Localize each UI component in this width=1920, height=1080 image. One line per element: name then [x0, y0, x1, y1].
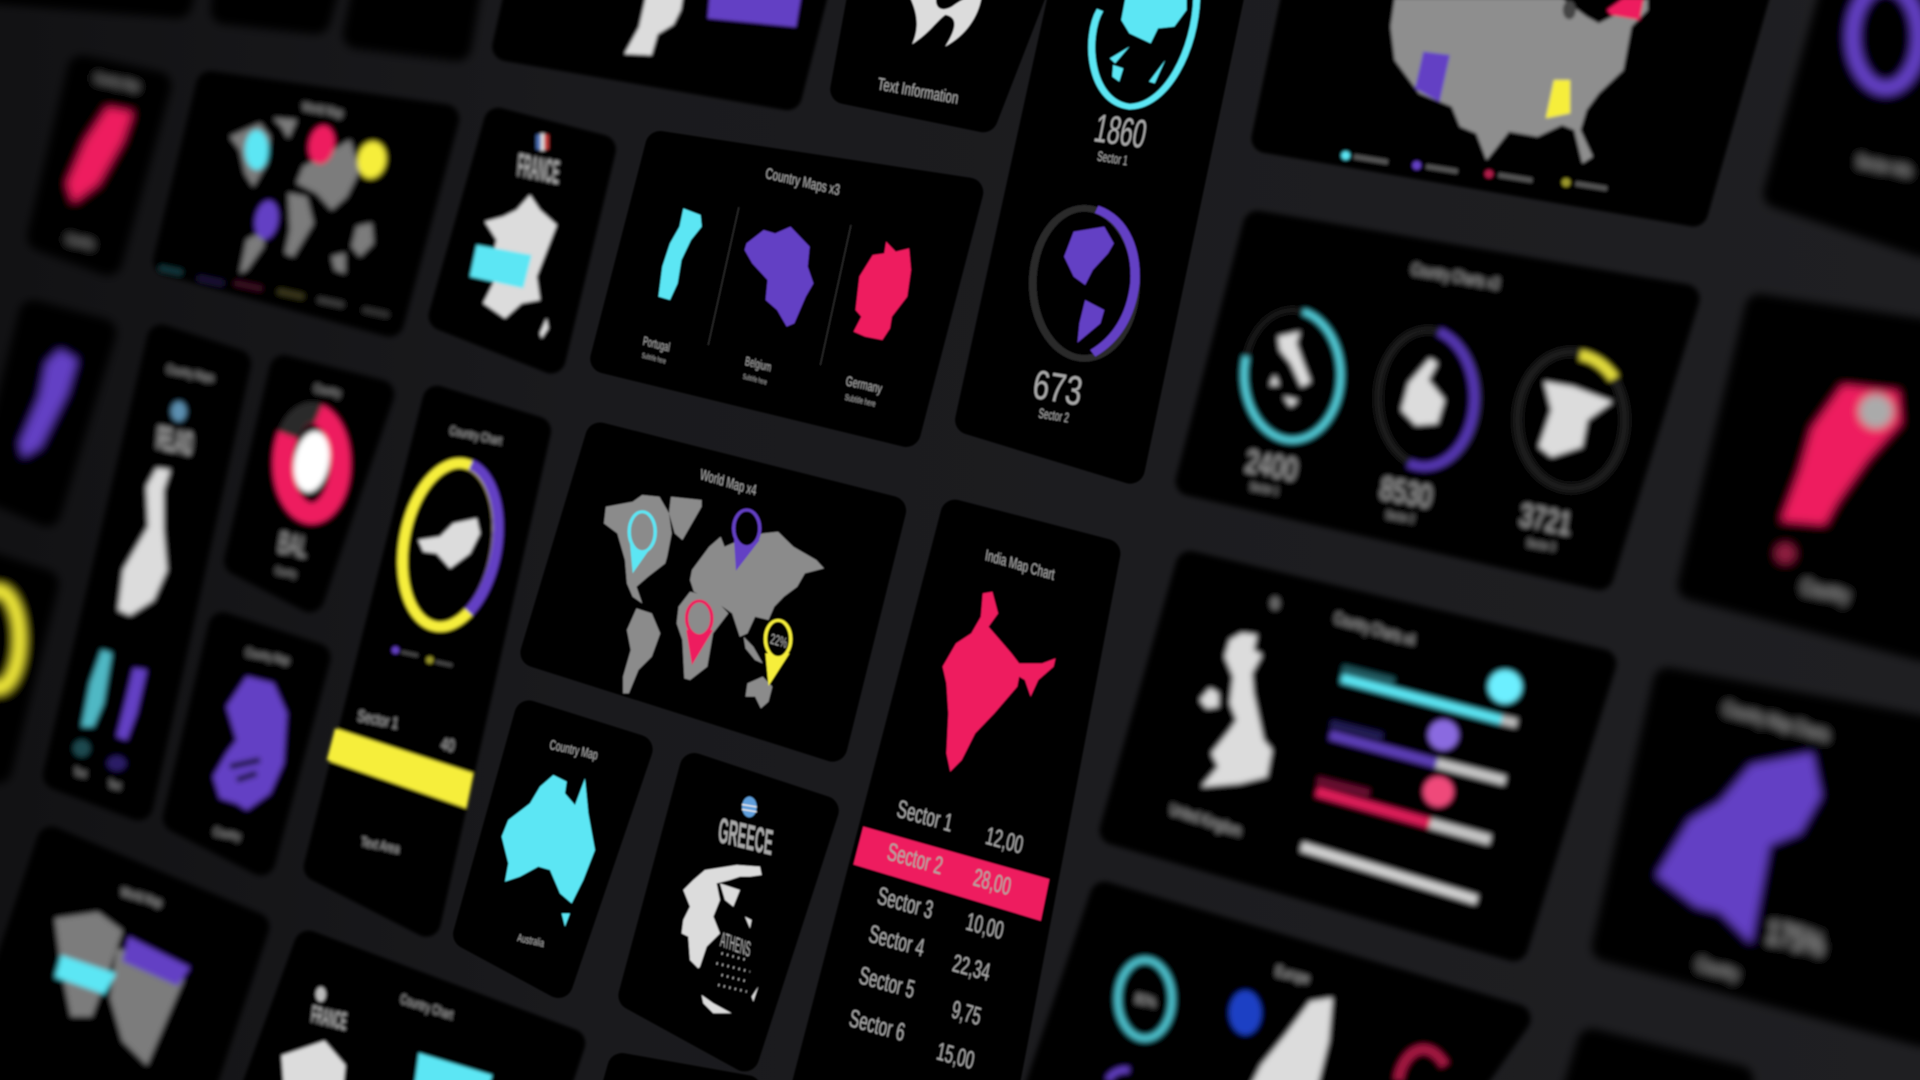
pin: cyan: [629, 512, 655, 573]
label: ATHENS: ATHENS: [719, 929, 752, 962]
label: Country: [1696, 954, 1740, 985]
chart: cyan ring: 80%: [1134, 989, 1157, 1011]
map: small purple country: [117, 668, 147, 740]
bar: yellow: [327, 728, 473, 808]
heading: Europe: [1275, 962, 1311, 987]
label: Country: [66, 233, 94, 251]
map region: purple state: [1415, 52, 1450, 102]
panel: Ireland tall card: [58, 339, 236, 806]
pin: purple: [252, 199, 281, 241]
heading: World Map: [301, 100, 344, 121]
value: 175%: [1764, 913, 1827, 963]
icon: flag: [536, 133, 549, 151]
panel: World Map x4: [535, 437, 891, 747]
callout: cyan box: [55, 955, 116, 994]
icon: flag: [171, 402, 186, 421]
panel: far left yellow ring card: [0, 566, 44, 769]
label: Sector 1: Sector 1: [356, 706, 400, 733]
divider: [820, 225, 851, 365]
panel: bottom right rings card: [1035, 896, 1516, 1080]
table: sector values: 12,00: [983, 822, 1025, 860]
table: sector values: 15,00: [934, 1038, 977, 1075]
label: Sector 1: Sector 1: [1096, 150, 1129, 169]
row highlight: Sector 2: [853, 827, 1049, 921]
legend dot: [1776, 544, 1795, 563]
pin: cyan: [245, 130, 268, 170]
panel: red circle card: [239, 370, 380, 598]
icon: Greek flag: [742, 797, 757, 817]
label: Belgium subtitle: Subtitle here: [742, 373, 768, 387]
map: Corsica: [540, 318, 548, 338]
label: Country: [213, 826, 241, 844]
panel: Country Maps x3: [605, 146, 969, 432]
map: small cyan country: [82, 650, 112, 727]
table: sector values: 22,34: [950, 949, 992, 987]
panel: bottom left world map card: [0, 841, 255, 1080]
bar: cyan: [414, 1053, 492, 1080]
chart: red ring: [283, 413, 340, 513]
label: Portugal subtitle: Subtitle here: [641, 352, 667, 366]
panel: Netherlands purple card: [1607, 682, 1920, 1032]
heading: FRANCE: FRANCE: [516, 148, 560, 192]
map: Belgium: [745, 227, 813, 327]
value: 673: 673: [1030, 361, 1086, 415]
map: Greece: [682, 865, 762, 1013]
map: Australia: [502, 775, 595, 927]
chart: Spain ring: [1518, 352, 1625, 488]
map: red country: [1782, 386, 1900, 524]
divider: [708, 207, 739, 345]
table: sector values: 28,00: [971, 864, 1013, 901]
heading: Country Map: [549, 738, 599, 763]
heading: Country Chart: Country Chart: [400, 992, 454, 1024]
table: sector values: Sector 1: [895, 795, 955, 838]
value: red: BAL: [277, 526, 310, 564]
table: sector values: Sector 3: [875, 882, 935, 925]
panel: right red country card: [1692, 309, 1920, 647]
panel: far right ring card: [1778, 0, 1920, 242]
map: Netherlands: [1657, 753, 1821, 943]
map: United Kingdom: [624, 0, 683, 55]
map: Portugal: [658, 208, 702, 300]
map: grey world: [55, 912, 184, 1065]
bar: white: [1302, 847, 1477, 900]
bar: red: [1316, 777, 1490, 840]
label: United Kingdom: United Kingdom: [1169, 800, 1242, 840]
panel: Country Charts x3: [1190, 225, 1685, 576]
panel: top UK map card: [507, 0, 818, 96]
table: sector values: Sector 2: [885, 838, 945, 881]
map: Germany: [854, 242, 911, 340]
heading: Country Map: [245, 646, 290, 668]
value: 40: 40: [440, 735, 456, 757]
bar: cyan: [1341, 665, 1522, 723]
heading: Country Charts x4: [1334, 609, 1416, 649]
map: white country: [118, 468, 170, 615]
label: Germany: Germany: [845, 374, 883, 397]
icon: flag: [316, 987, 326, 1002]
map: France: [483, 195, 557, 318]
map region: red state: [1607, 0, 1644, 20]
label: sector 1: Sector 1: [1249, 481, 1279, 498]
panel: UK bar chart card: [1114, 566, 1602, 947]
label: Portugal: Portugal: [642, 335, 671, 355]
table: sector values: Sector 4: [867, 920, 927, 963]
value: 8530: 8530: [1378, 470, 1434, 515]
map: purple country: [213, 677, 287, 810]
small markers: [73, 740, 126, 771]
heading: World Map: [120, 885, 163, 911]
chart: purple ring: [1853, 0, 1919, 88]
legend: [159, 265, 389, 318]
map: interior holes: [230, 760, 260, 780]
heading: FRANCE: FRANCE: [310, 999, 348, 1036]
map: India: [943, 592, 1055, 772]
table: sector values: Sector 5: [857, 962, 917, 1004]
label: Australia: [517, 932, 546, 950]
table: sector values: [847, 795, 1049, 1075]
callout: purple label: [708, 0, 802, 27]
pin: yellow with 22%: [765, 620, 791, 686]
value: 3721: 3721: [1518, 497, 1574, 542]
label: blurred caption: Sector Info: [1856, 151, 1913, 180]
panel: purple country card: [178, 627, 316, 861]
heading: Country Maps x3: Country Maps x3: [764, 164, 841, 199]
heading: GREECE: GREECE: [717, 810, 775, 863]
heading: IRELAND: IRELAND: [156, 419, 194, 464]
label: Germany subtitle: Subtitle here: [844, 392, 876, 409]
panel: small purple map card, left: [0, 315, 102, 512]
legend dot: blue: [1229, 991, 1261, 1035]
map: black and white globe fragment: [909, 0, 982, 47]
map: purple country: [20, 350, 77, 457]
value: 1860: 1860: [1091, 106, 1150, 156]
label: Text Area: [360, 834, 401, 857]
table: sector values: Sector 6: [847, 1004, 907, 1047]
labels: small country captions: Text: [107, 778, 122, 792]
panel: bottom far right card: [1573, 1043, 1739, 1080]
panel: Australia Country Map: [468, 715, 638, 983]
callout: purple box: [122, 937, 190, 986]
map: Scandinavia: [1249, 998, 1332, 1080]
chart: cyan ring: [1118, 960, 1172, 1038]
map: France: [282, 1041, 345, 1080]
chart: purple arc: [1108, 1070, 1129, 1080]
map: world: [230, 118, 373, 273]
label: Text Information: Text Information: [876, 75, 960, 109]
panel: coloured world map card: [159, 86, 444, 322]
lake: [1563, 1, 1576, 19]
label: Country: [1800, 575, 1851, 607]
heading: Country Charts x3: [1411, 260, 1501, 293]
labels: small country captions: Text: [73, 765, 87, 780]
chart: cyan globe ring: [1092, 0, 1197, 107]
label: sector 2: Sector 2: [1385, 509, 1415, 526]
label: Belgium: Belgium: [744, 355, 772, 375]
chart: Italy ring: [1244, 310, 1341, 440]
pin: red: [306, 124, 337, 166]
pin: red: [686, 601, 713, 665]
panel: Greece: [633, 768, 824, 1057]
map: Austria: [418, 518, 480, 568]
label: sector 3: Sector 3: [1526, 537, 1556, 554]
pin: purple: [734, 510, 760, 571]
map: world continents: [604, 495, 824, 708]
heading: World Map x4: World Map x4: [699, 466, 758, 499]
pin: yellow with 22%: 22%: [769, 630, 789, 652]
callout: cyan box: [470, 245, 532, 288]
panel: India Map Chart: [802, 514, 1106, 1080]
heading: Country Maps: [166, 363, 215, 385]
chart: yellow and purple ring: [390, 456, 510, 634]
chart: Denmark ring: [1378, 330, 1478, 467]
table: sector values: 9,75: [949, 996, 983, 1031]
heading: Country Map Charts: [1723, 699, 1830, 746]
heading: Country Chart: [449, 424, 503, 448]
panel: Austria yellow ring card: [318, 400, 536, 922]
panel: bottom clipped card: [612, 1068, 747, 1080]
bar: purple: [1330, 720, 1505, 781]
panel: small red map card: [42, 70, 157, 261]
table: sector values: 10,00: [964, 908, 1006, 945]
labels: small country captions: [73, 765, 122, 792]
panel: USA map card: [1266, 0, 1761, 212]
label: Country: [275, 565, 298, 580]
map region: yellow state: [1546, 80, 1570, 118]
panel: top-left clipped cards: [0, 0, 469, 47]
chart: purple globe ring: [1033, 208, 1136, 358]
heading: Country Map: [94, 72, 139, 94]
label: Sector 2: Sector 2: [1037, 407, 1070, 426]
map: United Kingdom: [1200, 597, 1280, 787]
marker: white dot: [1859, 394, 1893, 429]
pin: yellow: [355, 139, 389, 180]
panel: text information card: [845, 0, 1038, 118]
chart: yellow ring: [0, 590, 20, 688]
value: 2400: 2400: [1243, 443, 1300, 488]
panel: bottom France chart card: [251, 945, 571, 1080]
map: United States: [1391, 0, 1648, 163]
map: red country: [67, 108, 132, 202]
panel: globes card: [970, 0, 1234, 469]
chart: red arc: [1398, 1049, 1445, 1080]
label: Country: [313, 382, 342, 400]
panel: France card: [443, 122, 601, 359]
heading: India Map Chart: India Map Chart: [984, 546, 1056, 584]
legend: [1341, 151, 1607, 191]
legend: [392, 647, 453, 667]
